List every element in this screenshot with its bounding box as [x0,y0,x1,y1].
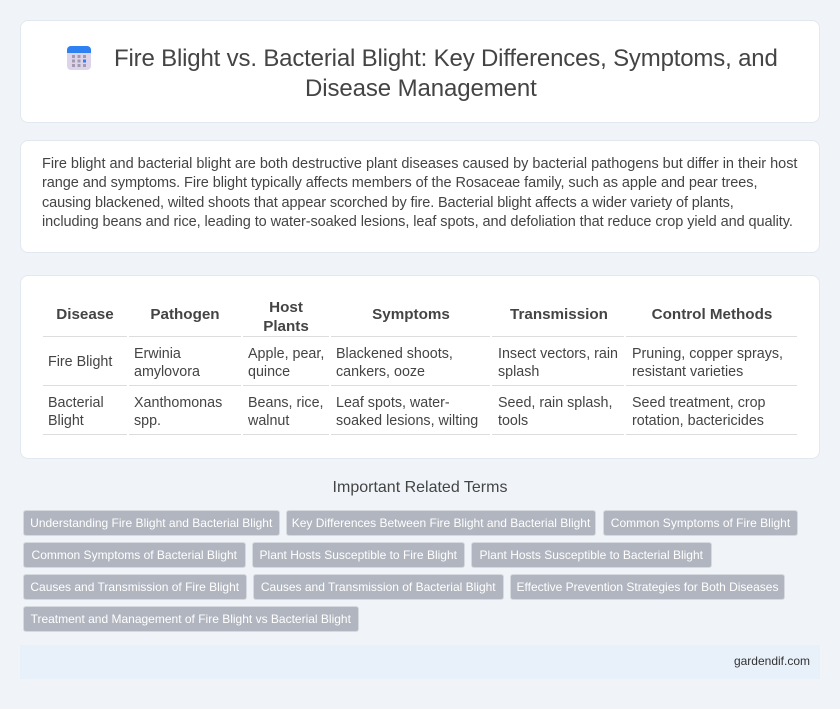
table row: Fire Blight: Insect vectors, rain [498,346,618,362]
tag list: related terms: Plant Hosts Susceptible to Bacterial Blight [480,548,703,562]
table row: Bacterial Blight: Xanthomonas [134,395,222,411]
table row: Fire Blight [48,346,783,380]
tag list: related terms: Causes and Transmission of Bacterial Blight [261,580,496,594]
panel: title card [20,20,820,123]
tag list: related terms: Plant Hosts Susceptible to Fire Blight [260,548,457,562]
text block: introduction: causing blackened, wilted shoots that appear scorched by fire. Bacterial blight affects a wider variety of plants, [42,195,734,211]
table row: Bacterial Blight [48,395,766,429]
table row: Fire Blight: quince [248,364,290,380]
table header: Control Methods [652,306,772,323]
table header: Pathogen [150,306,220,323]
table row: Bacterial Blight: tools [498,413,528,429]
text block: introduction: Fire blight and bacterial blight are both destructive plant diseases caused by bacterial pathogens but differ in their host [42,156,797,172]
title: Fire Blight vs. Bacterial Blight: Key Differences, Symptoms, and [114,45,778,72]
heading: related terms: Important Related Terms [333,479,507,496]
table header: Disease [56,306,114,323]
table row: Fire Blight: Fire Blight [48,354,112,370]
panel: comparison table [20,275,820,459]
table row: Bacterial Blight: Seed, rain splash, [498,395,612,411]
table row: Fire Blight: cankers, ooze [336,364,425,380]
footer bar [20,645,820,679]
title: Disease Management [305,75,537,102]
text block: introduction [42,156,798,230]
footer credit: gardendif.com [734,654,810,668]
tag list: related terms: Key Differences Between Fire Blight and Bacterial Blight [292,516,590,530]
table row: Bacterial Blight: soaked lesions, wilting [336,413,478,429]
table header: Plants [263,318,309,335]
table header: Symptoms [372,306,450,323]
text block: introduction: range and symptoms. Fire blight typically affects members of the Rosaceae family, such as apple and pear trees, [42,175,757,191]
table row: Fire Blight: Apple, pear, [248,346,324,362]
table row: Bacterial Blight: Blight [48,413,84,429]
tag list: related terms: Common Symptoms of Bacterial Blight [32,548,237,562]
table row: Bacterial Blight: Leaf spots, water- [336,395,450,411]
table header [56,299,772,335]
table row: Bacterial Blight: Seed treatment, crop [632,395,766,411]
table row: Fire Blight: Erwinia [134,346,181,362]
table header: Host [269,299,303,316]
tag list: related terms: Effective Prevention Strategies for Both Diseases [517,580,778,594]
panel: introduction [20,140,820,253]
table row: Fire Blight: resistant varieties [632,364,743,380]
table row: Fire Blight: Pruning, copper sprays, [632,346,783,362]
tag list: related terms: Treatment and Management of Fire Blight vs Bacterial Blight [31,612,351,626]
tag list: related terms: Understanding Fire Blight and Bacterial Blight [30,516,272,530]
table row: Fire Blight: splash [498,364,539,380]
table row: Bacterial Blight: spp. [134,413,161,429]
table row: Bacterial Blight: rotation, bactericides [632,413,764,429]
table row: Fire Blight: amylovora [134,364,200,380]
tag list: related terms: Common Symptoms of Fire Blight [611,516,790,530]
title [114,45,778,102]
text block: introduction: including beans and rice, leading to water-soaked lesions, leaf spots, and defoliation that reduce crop yield and quality. [42,214,793,230]
icon: calendar [67,46,91,70]
table header: Transmission [510,306,608,323]
table row: Bacterial Blight: Bacterial [48,395,104,411]
table row: Fire Blight: Blackened shoots, [336,346,453,362]
tag list: related terms [23,510,798,632]
table row: Bacterial Blight: Beans, rice, [248,395,324,411]
table row: Bacterial Blight: walnut [248,413,289,429]
tag list: related terms: Causes and Transmission of Fire Blight [30,580,239,594]
